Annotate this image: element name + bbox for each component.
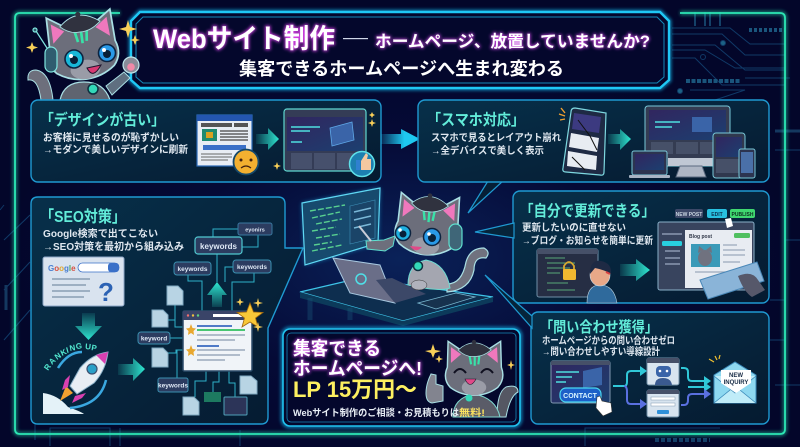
heading: Webサイト制作 [153, 24, 335, 54]
icon: broken phone [563, 108, 606, 175]
sparkles [425, 344, 515, 370]
arrow right [118, 358, 145, 381]
blog editor [658, 222, 754, 290]
sparks [709, 355, 720, 362]
arrow [256, 128, 279, 150]
body [408, 260, 450, 289]
tag [174, 262, 211, 275]
arrow [620, 259, 650, 281]
panel: inquiry [485, 275, 769, 424]
subtitle glow: ホームページ、放置していませんか? [375, 32, 650, 51]
body text: スマホで見るとレイアウト崩れ [431, 131, 561, 144]
icon: thumbs up [350, 152, 374, 176]
body text: →問い合わせしやすい導線設計 [542, 345, 660, 358]
sparks [559, 108, 565, 120]
form card [647, 390, 679, 417]
headline glow: ホームページへ! [293, 358, 422, 379]
contact button: CONTACT [563, 393, 598, 400]
code thumbnail [224, 397, 247, 415]
tablet [713, 133, 745, 178]
head [393, 191, 462, 258]
tag: keywords [200, 242, 238, 251]
cursor [725, 218, 733, 228]
arrow heads [640, 366, 711, 392]
blue arrow heads [640, 389, 711, 409]
blog editor: Blog post [689, 234, 712, 240]
ranking label: P [91, 343, 98, 353]
ranking label: I [65, 346, 70, 355]
panel: title [131, 12, 669, 88]
ranking label: K [59, 347, 68, 358]
happy eyes [454, 369, 493, 373]
central cat scene [300, 188, 493, 326]
envelope: NEW [729, 373, 743, 379]
panel: self update [475, 191, 769, 303]
heading: 「問い合わせ獲得」 [540, 318, 658, 336]
google card [43, 257, 124, 307]
tag: eyonirs [245, 228, 265, 234]
body text: →全デバイスで美しく表示 [431, 144, 544, 157]
robot card [647, 358, 679, 385]
tag [195, 237, 242, 254]
icon: worried face [234, 150, 258, 174]
envelope: INQUIRY [724, 380, 748, 386]
panel: smartphone [418, 100, 769, 213]
tag: keyword [141, 336, 167, 342]
connector arrow [381, 129, 420, 149]
ranking label: N [69, 343, 76, 353]
collar [88, 84, 98, 94]
headline: ホームページへ! [293, 358, 422, 379]
keypad [418, 293, 475, 309]
paw [411, 280, 427, 290]
tab edit [707, 209, 727, 218]
monitor [645, 106, 730, 166]
collar [414, 262, 422, 270]
code window [537, 249, 598, 297]
tag: keywords [178, 266, 208, 273]
tail [497, 386, 518, 417]
icon: old website [197, 115, 252, 166]
holographic screen [302, 188, 380, 265]
mascot: waving cat [26, 7, 140, 100]
arrow down [75, 313, 102, 340]
tag [238, 223, 272, 235]
worried person [587, 261, 617, 303]
heading: 「スマホ対応」 [427, 111, 525, 129]
search result page [183, 311, 252, 371]
connectors [168, 229, 258, 397]
ranking label: R [42, 362, 53, 372]
tag [233, 260, 271, 273]
arrow [608, 129, 631, 150]
document icons [152, 286, 257, 415]
tab new post [675, 209, 703, 218]
note: Webサイト制作のご相談・お見積もりは [293, 407, 459, 419]
headphone [449, 224, 462, 250]
tab publish: PUBLISH [732, 212, 754, 218]
desk [300, 278, 493, 321]
headline glow: 集客できる [293, 338, 381, 359]
body [60, 82, 110, 100]
flow arrows [613, 368, 705, 405]
subtitle: ホームページ、放置していませんか? [375, 32, 650, 51]
tab new post: NEW POST [676, 212, 702, 218]
head [445, 340, 503, 395]
tab edit: EDIT [711, 212, 723, 218]
tail [447, 248, 488, 292]
keyboard [700, 262, 764, 299]
tab publish [730, 209, 755, 218]
panel: design [31, 100, 420, 182]
rocket [43, 352, 108, 414]
body text: →モダンで美しいデザインに刷新 [43, 143, 188, 156]
collar [466, 394, 472, 402]
robot hand [738, 274, 765, 297]
head [43, 7, 122, 84]
body [453, 394, 500, 417]
body text: 更新したいのに直せない [522, 221, 626, 234]
ranking label: N [53, 351, 63, 362]
ranking label: A [47, 356, 58, 366]
speech tail [475, 223, 514, 238]
body text: →SEO対策を最初から組み込み [43, 240, 184, 253]
mouth [410, 246, 422, 250]
body text: Google検索で出てこない [43, 227, 158, 240]
paw [123, 57, 139, 73]
heading: 「自分で更新できる」 [520, 202, 655, 220]
ranking label: G [75, 341, 82, 351]
headphone [33, 28, 57, 72]
body text: →ブログ・お知らせを簡単に更新 [522, 234, 653, 247]
big arrow up [207, 282, 227, 307]
google card: Google [48, 264, 76, 273]
eyes [396, 226, 440, 246]
phone [739, 149, 755, 178]
sparkles [26, 20, 140, 53]
laptop [333, 258, 426, 303]
heading glow: Webサイト制作 [153, 24, 335, 54]
ranking label: U [85, 342, 92, 352]
laptop [632, 151, 667, 175]
thumb hand [426, 374, 443, 403]
icon: devices [629, 106, 755, 178]
panel: call to action [283, 329, 520, 426]
padlock [563, 262, 576, 280]
headline: 集客できる [293, 338, 381, 359]
google card: ? [98, 277, 114, 307]
tag [158, 378, 188, 392]
tag: keywords [158, 382, 188, 390]
tag [138, 332, 170, 344]
price: LP 15万円〜 [293, 377, 417, 402]
speech tail [468, 181, 503, 213]
sparkles [236, 298, 263, 332]
envelope [714, 362, 756, 403]
arm with stylus [366, 236, 395, 251]
tagline: 集客できるホームページへ生まれ変わる [239, 59, 564, 79]
tail [28, 70, 53, 100]
speech tail [485, 275, 532, 328]
image thumbnail [204, 392, 221, 402]
cursor hand [596, 396, 612, 416]
panel: seo [31, 197, 303, 424]
heading dash [343, 38, 368, 39]
contact button [560, 388, 601, 402]
tag: keywords [237, 264, 267, 271]
body text: お客様に見せるのが恥ずかしい [43, 131, 179, 144]
gold star [237, 303, 263, 327]
icon: modern website [284, 109, 366, 171]
eyes [65, 44, 116, 68]
body text: ホームページからの問い合わせゼロ [542, 334, 675, 347]
raised arm [106, 72, 130, 95]
heading: 「SEO対策」 [40, 207, 126, 226]
cta cat [425, 340, 518, 417]
keyword tags [138, 223, 272, 392]
sparkles [273, 112, 376, 170]
note: 無料! [459, 407, 485, 419]
mouth [87, 65, 101, 73]
website window [551, 361, 610, 403]
mouth [465, 379, 476, 384]
heading: 「デザインが古い」 [40, 110, 165, 129]
